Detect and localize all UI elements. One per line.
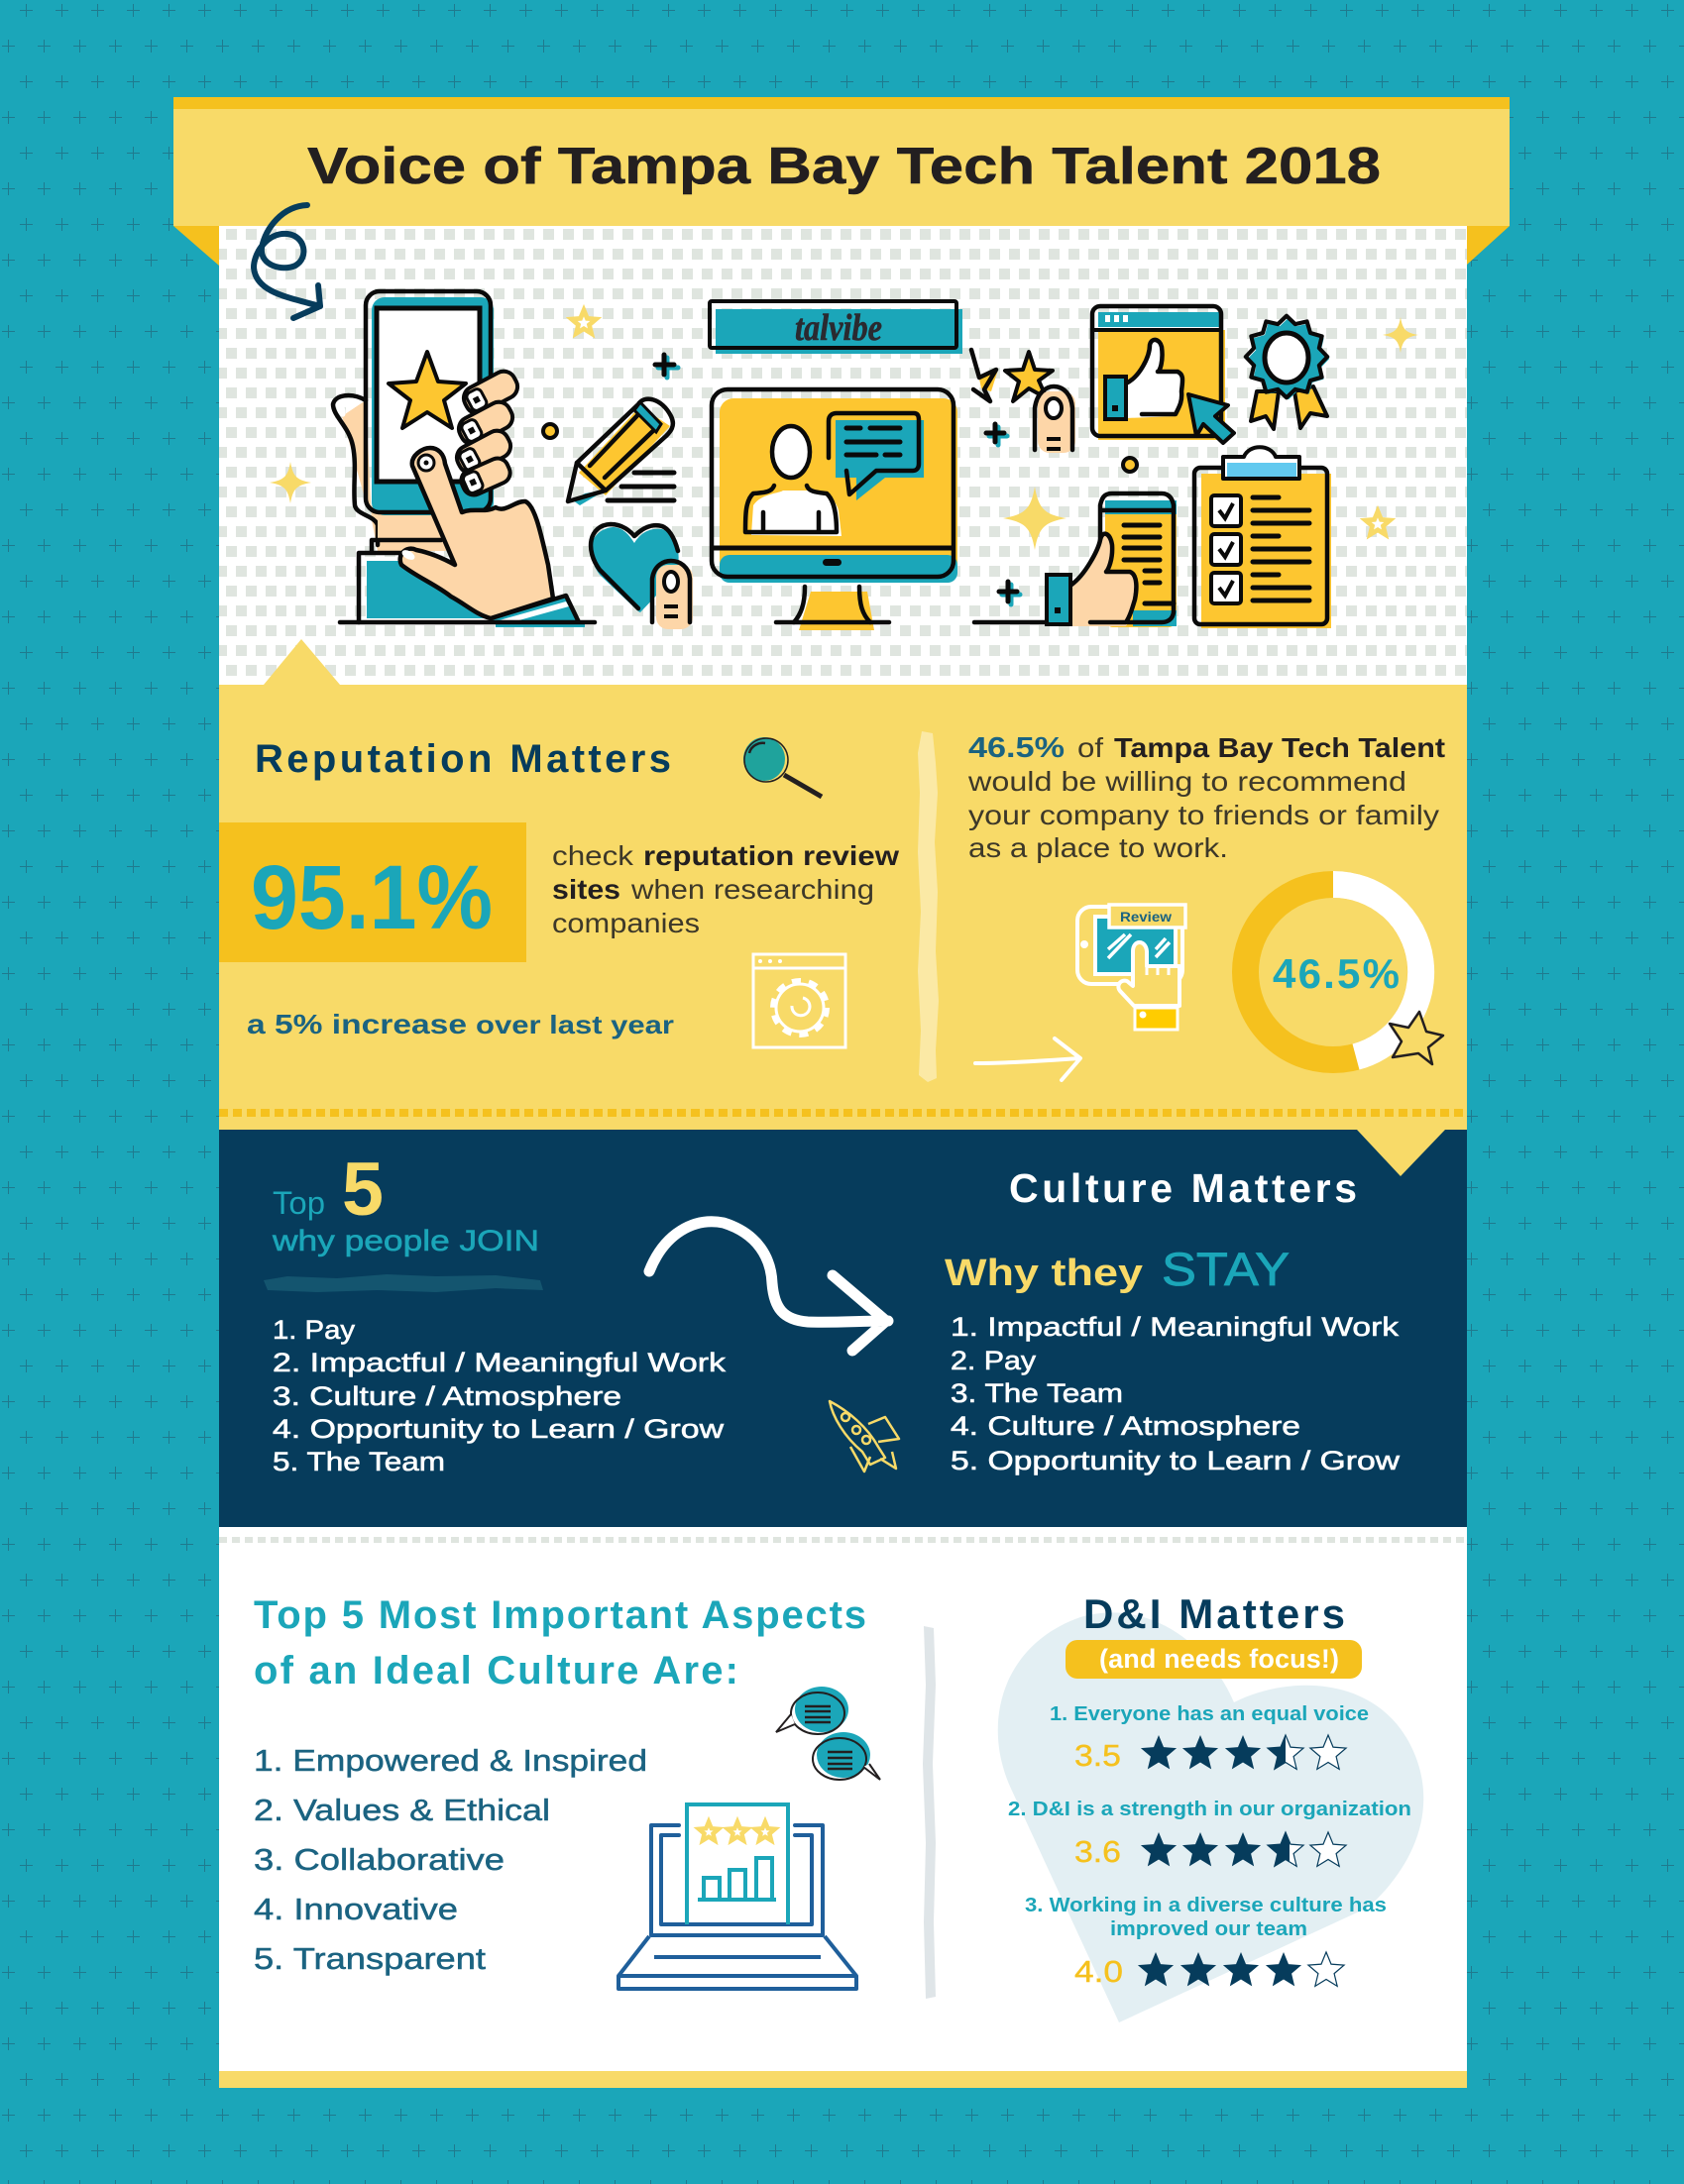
heading: why they stay [945, 1243, 1290, 1295]
list: stay: 3. The Team [951, 1378, 1123, 1408]
text: 46.5% recommend: Tampa Bay Tech Talent [1114, 732, 1445, 763]
list: join [273, 1315, 727, 1476]
icon: plus [986, 424, 1007, 445]
heading: reputation matters: Reputation Matters [255, 737, 671, 781]
icon: phone and thumb [974, 493, 1177, 627]
list: join: 4. Opportunity to Learn / Grow [273, 1414, 725, 1444]
list: ideal culture: 3. Collaborative [254, 1842, 505, 1877]
icon: star [1390, 1012, 1443, 1064]
icon: laptop with report [618, 1804, 856, 1989]
heading: why they stay: STAY [1162, 1243, 1290, 1295]
list: ideal culture [254, 1743, 647, 1976]
icon: pencil [568, 399, 674, 505]
panel: reputation matters [219, 639, 1467, 1130]
icon: lightning and star with finger [971, 350, 1075, 453]
icon: swirl arrow [254, 205, 320, 318]
divider brush [923, 1626, 936, 1999]
logo text: talvibe [795, 307, 882, 349]
text: 46.5% recommend [967, 732, 1445, 863]
heart background [998, 1612, 1423, 2022]
icon: plus [999, 582, 1020, 604]
footer strip [219, 2071, 1467, 2088]
list: join: 3. Culture / Atmosphere [273, 1381, 621, 1411]
list: stay: 5. Opportunity to Learn / Grow [951, 1446, 1401, 1475]
arrow: white right [975, 1038, 1080, 1080]
list: ideal culture: 2. Values & Ethical [254, 1793, 550, 1827]
title: Voice of Tampa Bay Tech Talent 2018 [307, 138, 1381, 195]
icon: heart with finger [591, 524, 693, 629]
icon: monitor with user [712, 389, 957, 630]
text: 5% increase [247, 1009, 674, 1039]
panel: culture matters [219, 1130, 1467, 1527]
list: join: 5. The Team [273, 1447, 445, 1476]
text: 46.5% recommend: your company to friends or family [968, 800, 1439, 830]
icon: talvibe logo bar [710, 301, 962, 354]
rating 3: improved our team [1110, 1918, 1307, 1940]
stat box 95.1%: 95.1% [251, 847, 493, 948]
icon: browser thumbs up [1092, 306, 1234, 443]
text: review sites: companies [552, 908, 700, 938]
icon: small star outline [572, 310, 596, 333]
arrow: curvy white [649, 1222, 888, 1351]
list: ideal culture: 4. Innovative [254, 1892, 458, 1926]
list: stay: 2. Pay [951, 1346, 1037, 1375]
heading: top 5 join [272, 1147, 539, 1257]
pill: needs focus: (and needs focus!) [1099, 1644, 1339, 1674]
panel: ideal culture and D&I [219, 1527, 1467, 2088]
title banner [173, 97, 1510, 266]
text: 5% increase: a 5% increase [247, 1009, 467, 1039]
rating 1: 3.5 [1074, 1738, 1121, 1773]
chart: donut 46.5% [1245, 884, 1443, 1064]
user [751, 491, 842, 536]
rating 2: 3.6 [1074, 1834, 1121, 1869]
icon: big sparkle [1003, 487, 1067, 550]
text: 46.5% recommend: would be willing to recommend [967, 766, 1406, 797]
text: 46.5% recommend: 46.5% [968, 732, 1065, 764]
text: review sites: check [552, 840, 634, 871]
icon: review hand [1077, 905, 1185, 1030]
donut value: 46.5% [1273, 950, 1400, 997]
rating 1 [1050, 1703, 1369, 1773]
list: join: 1. Pay [273, 1315, 356, 1345]
heading: why they stay: Why they [945, 1253, 1143, 1294]
icon: magnifier [743, 737, 822, 797]
list: stay [951, 1312, 1401, 1475]
icon: plus [655, 355, 678, 378]
text: review sites: sites [552, 874, 620, 905]
heading: culture matters: Culture Matters [1009, 1165, 1357, 1211]
rating 1: 1. Everyone has an equal voice [1050, 1703, 1369, 1725]
icon: sparkle right [1383, 317, 1418, 353]
icon: award badge [1246, 316, 1329, 429]
icon: small star outline right [1366, 511, 1390, 534]
brush stroke [264, 1274, 543, 1292]
icon: gear window [753, 954, 845, 1047]
rating 3 [1025, 1895, 1387, 1989]
heading: ideal culture: Top 5 Most Important Aspects [254, 1593, 866, 1637]
text: 46.5% recommend: as a place to work. [968, 832, 1228, 863]
icon: speech bubbles [776, 1687, 880, 1780]
rating 3: 4.0 [1074, 1954, 1123, 1989]
list: stay: 4. Culture / Atmosphere [951, 1411, 1300, 1441]
icon: small circle [543, 424, 557, 438]
icon: clipboard checklist [1194, 447, 1331, 628]
pointer triangle [264, 639, 340, 685]
icon: phone and hand [333, 291, 595, 627]
speech bubble [836, 420, 924, 500]
list: stay: 1. Impactful / Meaningful Work [951, 1312, 1400, 1342]
heading: ideal culture [254, 1593, 866, 1693]
stat box 95.1% [219, 822, 526, 962]
list: ideal culture: 1. Empowered & Inspired [254, 1743, 647, 1778]
heading: D&I matters: D&I Matters [1083, 1590, 1345, 1637]
pill: needs focus [1066, 1640, 1362, 1679]
heading: top 5 join: 5 [342, 1147, 384, 1232]
text: 5% increase: over last year [476, 1010, 674, 1039]
rating 3: 3. Working in a diverse culture has [1025, 1895, 1387, 1916]
text: review sites [552, 840, 899, 938]
icon: sparkle left [270, 462, 311, 503]
panel: illustration hero [219, 205, 1467, 685]
text: 46.5% recommend: of [1077, 732, 1103, 763]
icon: rocket [830, 1401, 899, 1472]
divider brush [918, 731, 939, 1082]
rating 2 [1008, 1799, 1411, 1869]
heading: top 5 join: why people JOIN [272, 1225, 539, 1257]
rating 2: 2. D&I is a strength in our organization [1008, 1799, 1411, 1820]
list: ideal culture: 5. Transparent [254, 1941, 486, 1976]
pointer triangle [1357, 1130, 1445, 1176]
dashed strip [219, 1109, 1467, 1117]
text: review sites: when researching [630, 874, 874, 905]
heading: top 5 join: Top [273, 1185, 325, 1221]
list: join: 2. Impactful / Meaningful Work [273, 1348, 727, 1377]
text: review sites: reputation review [643, 840, 899, 871]
icon: circle [1123, 458, 1137, 472]
heading: ideal culture: of an Ideal Culture Are: [254, 1649, 738, 1693]
icon: review hand: Review [1120, 909, 1172, 925]
